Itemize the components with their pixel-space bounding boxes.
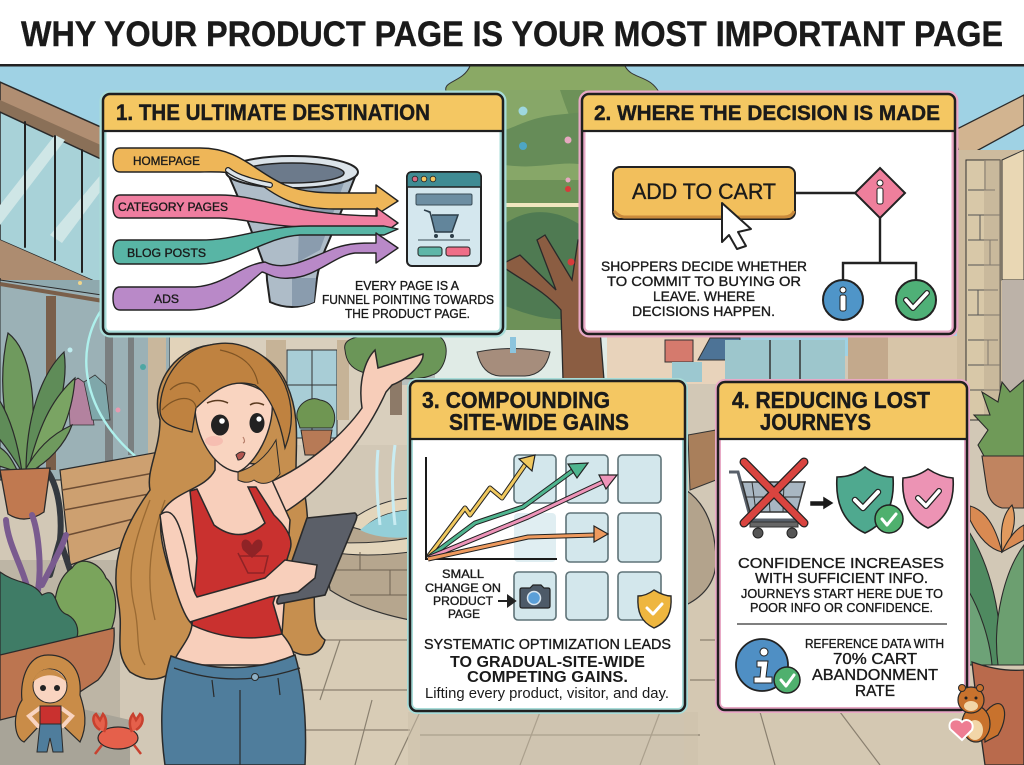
back hair (116, 344, 325, 679)
heading: 4. REDUCING LOST (732, 387, 930, 413)
caption: THE PRODUCT PAGE. (345, 306, 470, 321)
icon: green shield (837, 467, 903, 533)
arrow: ads (113, 233, 398, 310)
blush (205, 436, 223, 446)
confidence text (738, 555, 944, 615)
front hair (160, 343, 291, 448)
icon: cursor (722, 203, 751, 249)
nose (243, 437, 244, 443)
icon: camera (520, 585, 550, 608)
small change label: PRODUCT (433, 594, 494, 608)
reference data text: REFERENCE DATA WITH (805, 637, 944, 651)
icon: info with check (736, 639, 800, 693)
decision tree (795, 168, 936, 320)
mouth (236, 452, 245, 460)
conclusion text: SYSTEMATIC OPTIMIZATION LEADS (424, 637, 671, 653)
icon: gold shield (638, 590, 671, 628)
funnel rim front (228, 170, 270, 185)
confidence text: POOR INFO OR CONFIDENCE. (750, 600, 933, 615)
mid storefront (190, 335, 410, 445)
potted shrub (297, 399, 335, 428)
page tile grid (514, 455, 661, 620)
title band (0, 0, 1024, 66)
raised arm (270, 350, 423, 515)
reference data text: 70% CART (833, 651, 918, 668)
arrow to camera (498, 596, 515, 606)
heading: SITE-WIDE GAINS (449, 409, 629, 435)
eyebrows (207, 400, 264, 405)
arrow: blog posts (113, 226, 398, 264)
heading (732, 387, 930, 435)
face (195, 383, 272, 472)
reference data text: RATE (855, 683, 895, 700)
confidence text: CONFIDENCE INCREASES (738, 555, 944, 572)
add to cart button (613, 167, 795, 219)
plant: left potted palm (0, 333, 75, 519)
caption: FUNNEL POINTING TOWARDS (322, 292, 494, 307)
arrow: homepage (113, 148, 398, 215)
small change label (425, 567, 501, 621)
panel 1: the ultimate destination (103, 94, 503, 334)
arrow: ads: ADS (154, 292, 179, 306)
panel 2: where the decision is made (582, 94, 955, 334)
character: chibi mascot (15, 655, 85, 752)
heading: JOURNEYS (760, 409, 871, 435)
conclusion text: TO GRADUAL-SITE-WIDE (450, 654, 645, 671)
body text: SHOPPERS DECIDE WHETHER (601, 258, 807, 274)
panel 3: compounding site-wide gains (410, 381, 685, 711)
arrow: blog posts: BLOG POSTS (127, 246, 206, 260)
panel 4: reducing lost journeys (718, 382, 967, 710)
character: crab (93, 714, 143, 754)
paving (0, 560, 120, 765)
heading: 2. WHERE THE DECISION IS MADE (594, 101, 940, 125)
body text: LEAVE. WHERE (653, 288, 755, 304)
body text (601, 258, 807, 319)
plant: lower-left big pot (0, 515, 116, 720)
character: woman with tablet (116, 343, 423, 765)
arrow (811, 498, 832, 508)
left building (0, 82, 103, 340)
jeans (162, 655, 306, 765)
icon: crossed-out cart (729, 462, 805, 538)
reference data text: ABANDONMENT (812, 667, 939, 684)
caption: EVERY PAGE IS A (355, 278, 459, 293)
tablet (277, 513, 357, 604)
conclusion text (424, 637, 671, 702)
lower fountain (323, 515, 410, 620)
heading: 3. COMPOUNDING (422, 387, 610, 413)
add to cart button: ADD TO CART (632, 179, 776, 204)
heading (422, 387, 629, 435)
arrow: homepage: HOMEPAGE (133, 154, 200, 168)
bench (60, 450, 170, 565)
funnel (226, 156, 358, 307)
plant: right upper pot (974, 380, 1024, 508)
lower arm and hand (160, 512, 317, 622)
red top (190, 487, 291, 638)
icon: product page browser (407, 172, 481, 266)
eyes (211, 414, 229, 436)
confidence text: JOURNEYS START HERE DUE TO (741, 586, 943, 601)
torso skin (161, 460, 295, 665)
small change label: CHANGE ON (425, 581, 501, 595)
icon: pink shield (903, 469, 953, 528)
character: squirrel with heart (949, 684, 1005, 742)
conclusion text: COMPETING GAINS. (467, 669, 628, 686)
confidence text: WITH SUFFICIENT INFO. (755, 570, 928, 587)
growth chart (426, 455, 617, 559)
swirl of light (86, 305, 170, 480)
small change label: PAGE (448, 607, 480, 621)
small change label: SMALL (442, 567, 484, 581)
shirt print (242, 540, 262, 558)
hair by neck (238, 440, 280, 483)
body text: DECISIONS HAPPEN. (632, 303, 775, 319)
right building (955, 95, 1024, 160)
heading: 1. THE ULTIMATE DESTINATION (116, 100, 430, 125)
caption (322, 278, 494, 321)
plant: right big leaves (968, 505, 1024, 765)
body text: TO COMMIT TO BUYING OR (607, 273, 801, 289)
arrow: category pages (113, 195, 398, 238)
conclusion text: Lifting every product, visitor, and day. (425, 686, 669, 702)
arrow: category pages: CATEGORY PAGES (118, 202, 228, 214)
reference data text (805, 637, 944, 700)
